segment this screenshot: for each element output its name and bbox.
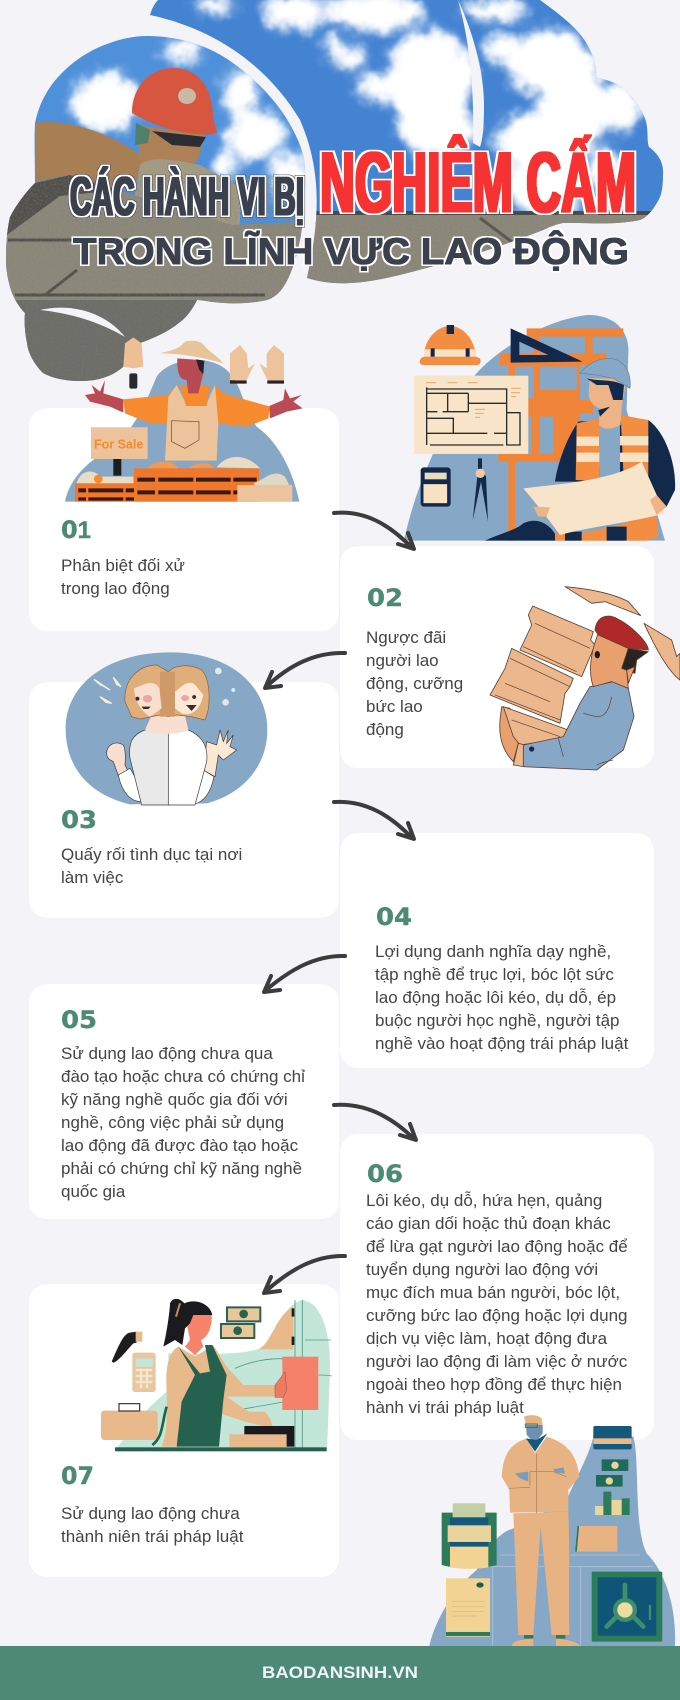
flying paper right	[644, 623, 680, 680]
left fist and arm	[107, 743, 128, 776]
blue dome	[404, 315, 665, 541]
description 05: đào tạo hoặc chưa có chứng chỉ	[61, 1067, 305, 1086]
arrow 01 to 02	[334, 513, 414, 549]
text: item 07	[61, 1462, 244, 1546]
document lines	[452, 1602, 485, 1616]
neck and head	[589, 378, 627, 429]
gloves	[230, 345, 284, 380]
wallet	[593, 1426, 632, 1449]
number 05: 05	[61, 1006, 97, 1034]
monitor	[576, 1526, 617, 1552]
safe handles	[607, 1585, 643, 1627]
red bag	[282, 1357, 318, 1410]
box bottom	[503, 707, 568, 745]
description 03: làm việc	[61, 868, 124, 887]
white cabbage	[217, 457, 260, 468]
pen	[646, 1605, 653, 1620]
card 05	[29, 984, 339, 1219]
shirt	[523, 682, 634, 770]
safe door	[598, 1577, 656, 1636]
left sleeve	[118, 768, 142, 802]
shirt folds	[558, 697, 613, 765]
arrow 02 to 03	[265, 653, 345, 688]
hair	[125, 665, 209, 720]
compass joint	[476, 469, 485, 478]
briefcase	[101, 1411, 158, 1440]
card 02	[340, 546, 654, 768]
bone-shaped item	[253, 473, 290, 487]
hair	[622, 648, 648, 673]
description 02: bức lao	[366, 697, 423, 716]
calculator screen	[425, 473, 447, 479]
furniture lines	[477, 1555, 653, 1646]
arms	[123, 385, 270, 427]
box top	[520, 606, 595, 677]
number 02: 02	[367, 584, 403, 612]
arrow 06 to 07	[264, 1256, 345, 1293]
illustration: shop assistant	[101, 1299, 332, 1451]
description 06: Lôi kéo, dụ dỗ, hứa hẹn, quảng	[366, 1191, 602, 1210]
arrow 03 to 04	[334, 802, 414, 839]
banknotes	[221, 1307, 260, 1338]
description 05: lao động đã được đào tạo hoặc	[61, 1136, 299, 1155]
document seal	[476, 1582, 484, 1588]
apron tie	[152, 1407, 167, 1445]
counter	[115, 1447, 327, 1451]
hat	[595, 616, 648, 650]
flying paper	[565, 587, 641, 616]
card 01	[29, 408, 339, 631]
description 04: buộc người học nghề, người tập	[375, 1011, 620, 1030]
description 05: Sử dụng lao động chưa qua	[61, 1044, 273, 1063]
description 06: người lao động đi làm việc ở nước	[366, 1352, 628, 1371]
description 06: ngoài theo hợp đồng để thực hiện	[366, 1375, 622, 1394]
number 07: 07	[61, 1462, 94, 1490]
vegetables	[147, 461, 213, 468]
description 04: lao động hoặc lôi kéo, dụ dỗ, ép	[375, 988, 616, 1007]
description 06: cáo gian dối hoặc thủ đoạn khác	[366, 1214, 611, 1233]
illustration: market seller	[65, 337, 303, 502]
left shirt	[130, 730, 168, 805]
footer bar	[0, 1646, 680, 1700]
head	[185, 1313, 212, 1355]
banknote marks two	[233, 1326, 242, 1335]
text: item 05	[61, 1006, 305, 1201]
right hand and arm	[203, 730, 237, 777]
lightning	[94, 677, 121, 703]
description 02: động, cưỡng	[366, 674, 463, 693]
neck	[145, 715, 188, 734]
glove	[133, 159, 240, 228]
safe dial	[617, 1602, 633, 1618]
illustration: worker carrying boxes	[490, 587, 680, 770]
bandana	[135, 123, 150, 145]
description 04: nghề vào hoạt động trái pháp luật	[375, 1034, 629, 1053]
description 05: kỹ năng nghề quốc gia đối với	[61, 1090, 288, 1109]
hat strap	[431, 325, 470, 357]
hat logo	[178, 88, 196, 104]
big crate	[134, 468, 259, 502]
hair	[196, 359, 204, 374]
photo: left lobe with worker	[6, 36, 306, 381]
cheeks	[143, 695, 189, 702]
description 06: hành vi trái pháp luật	[366, 1398, 524, 1417]
trowel	[123, 337, 143, 368]
notes	[596, 1459, 628, 1487]
footer text: BAODANSINH.VN	[262, 1663, 418, 1682]
description 01: Phân biệt đối xử	[61, 556, 185, 575]
number 04: 04	[376, 903, 412, 931]
card terminal	[132, 1353, 156, 1392]
description 06: tuyển dụng người lao động với	[366, 1260, 598, 1279]
arrow 04 to 05	[264, 956, 345, 992]
description 07: thành niên trái pháp luật	[61, 1527, 244, 1546]
neck and face	[177, 358, 203, 393]
man legs	[513, 1512, 569, 1635]
hat band	[424, 349, 476, 357]
description 01: trong lao động	[61, 579, 170, 598]
scanner	[112, 1332, 137, 1363]
safe wheel	[613, 1598, 637, 1622]
man shoes	[512, 1638, 580, 1646]
vest stripes	[577, 436, 648, 462]
description 02: người lao	[366, 651, 439, 670]
note marks	[606, 1462, 619, 1485]
right sleeve	[193, 770, 214, 804]
number 03: 03	[61, 806, 97, 834]
apron pocket	[172, 421, 199, 448]
crossed hands	[515, 1467, 565, 1482]
arrows	[264, 513, 416, 1293]
mint background	[115, 1300, 330, 1450]
description 02: động	[366, 720, 404, 739]
door hinges	[292, 1308, 294, 1345]
yellow coins	[595, 1500, 622, 1515]
machine bills	[453, 1503, 485, 1520]
cuff	[513, 743, 525, 767]
calculator keys	[423, 484, 447, 503]
hair band	[176, 1303, 180, 1317]
hair	[524, 1415, 543, 1425]
number 01: 01	[61, 516, 91, 544]
wallet stripe	[593, 1438, 632, 1444]
roof ground	[6, 175, 302, 381]
text: item 03	[61, 806, 242, 887]
machine top	[450, 1517, 488, 1525]
roof lines	[8, 240, 265, 295]
floor plan	[427, 387, 520, 445]
worker face	[138, 126, 205, 164]
sign text: For Sale	[94, 436, 143, 451]
terminal screen	[136, 1358, 153, 1367]
machine panel	[448, 1525, 491, 1542]
card 07	[29, 1284, 339, 1577]
ear	[627, 667, 635, 683]
hard hat	[132, 68, 217, 134]
description 07: Sử dụng lao động chưa	[61, 1504, 240, 1523]
machine bar	[450, 1542, 488, 1547]
box lines	[495, 623, 590, 737]
hair	[587, 378, 624, 417]
text: item 04	[375, 903, 629, 1053]
description 05: phải có chứng chỉ kỹ năng nghề	[61, 1159, 302, 1178]
glasses	[525, 1424, 537, 1427]
description 02: Ngược đãi	[366, 628, 446, 647]
right hand	[269, 388, 303, 418]
title line 1 dark: CÁC HÀNH VI BỊ	[70, 165, 304, 227]
tan wall	[258, 1307, 293, 1349]
hero photo: worker under cloudy sky	[0, 0, 680, 400]
collar	[526, 1433, 547, 1452]
photo: sky and roof right part	[150, 0, 664, 284]
tan box	[229, 1434, 287, 1447]
hand	[500, 707, 518, 762]
blueprint	[414, 376, 528, 454]
sunglasses	[152, 131, 206, 147]
illustration: bank manager	[429, 1415, 675, 1646]
crescent: sky highlight	[458, 0, 484, 147]
hand on bag	[275, 1372, 287, 1397]
eyes and mouths	[135, 695, 197, 711]
man jacket	[502, 1437, 579, 1513]
face	[591, 633, 628, 688]
terminal keys	[136, 1369, 152, 1388]
description 04: Lợi dụng danh nghĩa dạy nghề,	[375, 942, 611, 961]
document footer	[446, 1632, 490, 1636]
shirt collar	[180, 385, 210, 406]
vest	[576, 415, 658, 540]
scaffold block	[498, 353, 607, 541]
apron	[177, 1345, 227, 1447]
box middle	[490, 648, 573, 723]
plan notes	[426, 383, 521, 417]
hat	[160, 341, 223, 363]
banknote marks	[239, 1310, 248, 1318]
button	[529, 746, 534, 752]
right shirt	[168, 730, 207, 805]
card 04	[340, 833, 654, 1068]
helmet	[580, 358, 630, 388]
man socks	[524, 1635, 565, 1639]
text: item 01	[61, 516, 185, 598]
hard hat	[420, 326, 481, 365]
rolled plan	[523, 462, 665, 535]
box	[237, 485, 292, 502]
right face	[175, 683, 203, 714]
briefcase handle	[119, 1404, 140, 1411]
machine tray	[450, 1547, 488, 1569]
small crate	[75, 483, 134, 502]
number 06: 06	[367, 1160, 403, 1188]
lower vest	[555, 517, 658, 541]
scanner tip	[136, 1332, 142, 1342]
eye	[595, 651, 600, 658]
blue backdrop	[429, 1437, 675, 1646]
card 03	[29, 682, 339, 918]
title line 2: TRONG LĨNH VỰC LAO ĐỘNG	[73, 230, 629, 272]
hair	[163, 1299, 212, 1347]
left hand	[85, 380, 123, 413]
description 05: nghề, công việc phải sử dụng	[61, 1113, 284, 1132]
worker sleeves and shirt	[555, 420, 675, 507]
set square	[511, 328, 583, 363]
counting machine	[442, 1513, 497, 1568]
scaffold windows	[515, 367, 577, 453]
document	[446, 1578, 490, 1637]
description 04: tập nghề để trục lợi, bóc lột sức	[375, 965, 614, 984]
description 06: để lừa gạt người lao động hoặc để	[366, 1237, 628, 1256]
dark counter box	[244, 1426, 294, 1447]
scaffold top bars	[527, 328, 623, 353]
fruit	[94, 475, 103, 483]
description 05: quốc gia	[61, 1182, 126, 1201]
hands	[533, 495, 667, 517]
description 03: Quấy rối tình dục tại nơi	[61, 845, 242, 864]
sign	[91, 427, 148, 459]
head	[526, 1425, 543, 1443]
compass	[473, 458, 488, 522]
description 06: dịch vụ việc làm, hoạt động đưa	[366, 1329, 608, 1348]
text: item 06	[366, 1160, 628, 1417]
crescent: lower lobe highlight	[40, 308, 125, 337]
hair center	[160, 672, 175, 717]
illustration: two-faced woman	[66, 652, 267, 805]
left face	[134, 683, 162, 717]
card 06	[340, 1134, 654, 1440]
illustration: construction engineer	[404, 315, 675, 541]
sign post	[113, 459, 121, 476]
coins	[603, 1492, 630, 1515]
lower dark hump	[485, 521, 557, 541]
description 06: mục đích mua bán người, bóc lột,	[366, 1283, 620, 1302]
body and sleeves	[162, 1345, 275, 1447]
text: item 02	[366, 584, 463, 739]
title	[70, 135, 636, 272]
flowers	[215, 668, 235, 706]
small crate slats	[78, 488, 134, 501]
left produce	[77, 472, 133, 483]
lower lobe	[16, 300, 200, 381]
apron	[165, 385, 218, 461]
roof dark eave	[7, 175, 112, 235]
trowel handle	[129, 373, 137, 389]
monitor edge	[576, 1526, 578, 1552]
safe	[592, 1572, 662, 1642]
arrow 05 to 06	[334, 1105, 416, 1140]
calculator	[421, 467, 451, 507]
lower navy	[565, 527, 627, 541]
blue dome	[65, 360, 299, 502]
description 06: cưỡng bức lao động hoặc lợi dụng	[366, 1306, 628, 1325]
jacket lines	[509, 1453, 567, 1513]
door lines	[218, 1300, 332, 1448]
blue circle	[66, 652, 267, 804]
worker arm	[35, 122, 140, 188]
big crate slats	[137, 478, 257, 494]
glove cuffs	[230, 380, 284, 384]
